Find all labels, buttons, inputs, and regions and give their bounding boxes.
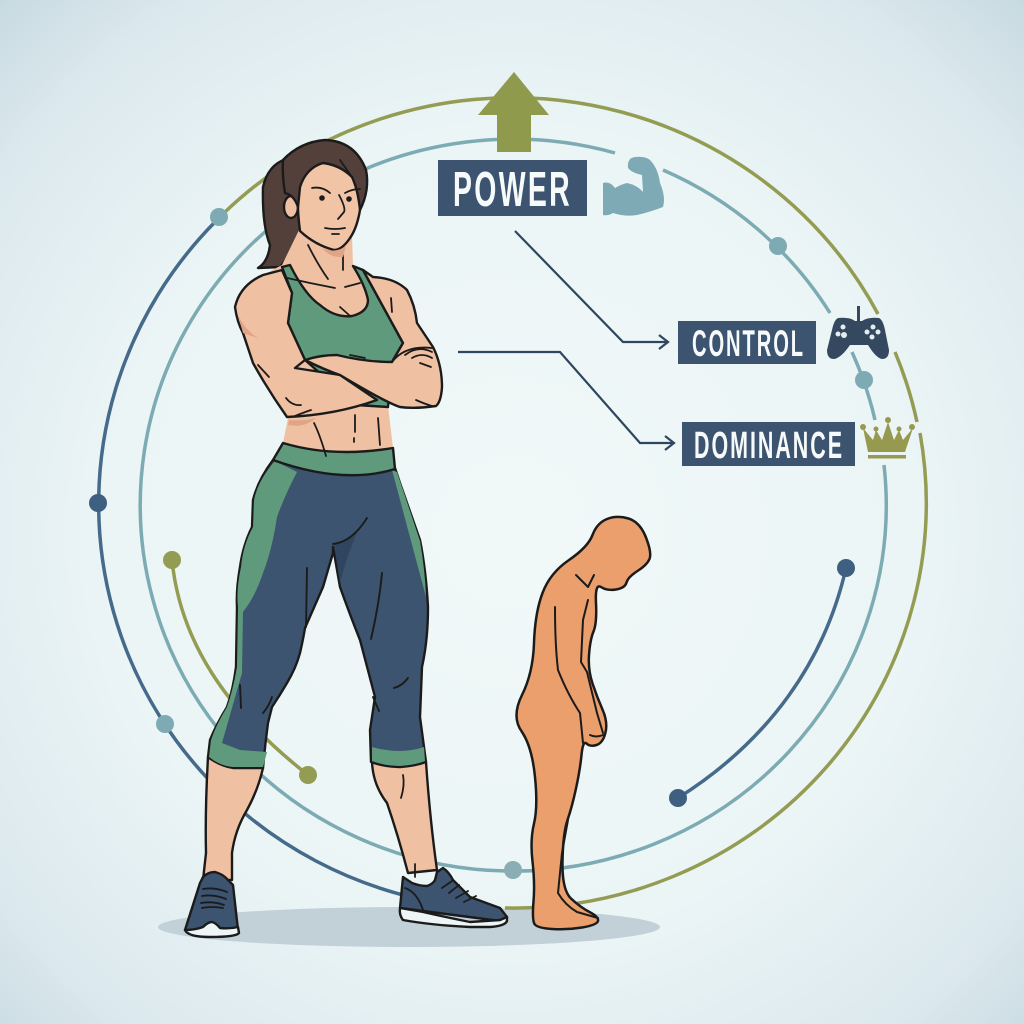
waistband: [273, 443, 395, 475]
connector: figure to dominance: [458, 352, 674, 450]
up arrow: [478, 72, 549, 152]
face: [298, 152, 360, 250]
label: control: CONTROL: [692, 323, 805, 364]
label: power: POWER: [453, 163, 572, 217]
label: dominance: DOMINANCE: [694, 425, 844, 467]
label: control: [678, 321, 816, 364]
torso: [263, 228, 405, 455]
icon: flexed bicep: [603, 157, 664, 216]
head: [283, 140, 367, 257]
leggings: [208, 460, 428, 768]
label: power: [438, 160, 587, 217]
label: dominance: [682, 422, 855, 467]
right shoe: [400, 775, 507, 927]
crotch shade: [334, 530, 358, 583]
abs and neck lines: [278, 245, 380, 456]
connector: power to control: [515, 231, 668, 349]
ponytail: [258, 159, 305, 268]
icon: crown: [860, 417, 915, 458]
child arm and leg lines: [555, 575, 603, 918]
shadow accents: [238, 315, 316, 426]
legging green panels: [209, 461, 426, 767]
jaw line: [298, 207, 360, 250]
hair: [283, 140, 367, 210]
circular rings: [99, 98, 926, 908]
blue ring: [99, 222, 846, 895]
teal ring: [140, 139, 886, 871]
left shoe: [185, 872, 239, 937]
ring nodes: [89, 208, 873, 879]
figure: standing woman: [185, 140, 507, 937]
eyes: [319, 195, 325, 201]
figure: bowed child: [516, 517, 650, 929]
facial features: [312, 160, 360, 234]
ear: [284, 196, 298, 218]
ground shadow: [158, 907, 660, 947]
hand and arm detail lines: [258, 298, 432, 416]
olive ring: [172, 98, 926, 908]
child body: [516, 517, 650, 929]
sports top: [282, 265, 403, 407]
neck shadow: [322, 246, 346, 257]
icon: game controller: [827, 306, 889, 359]
crossed arm: front: [305, 270, 442, 408]
calves: [203, 757, 437, 880]
legging fold lines: [240, 518, 408, 713]
crossed arm: rear: [235, 270, 377, 417]
